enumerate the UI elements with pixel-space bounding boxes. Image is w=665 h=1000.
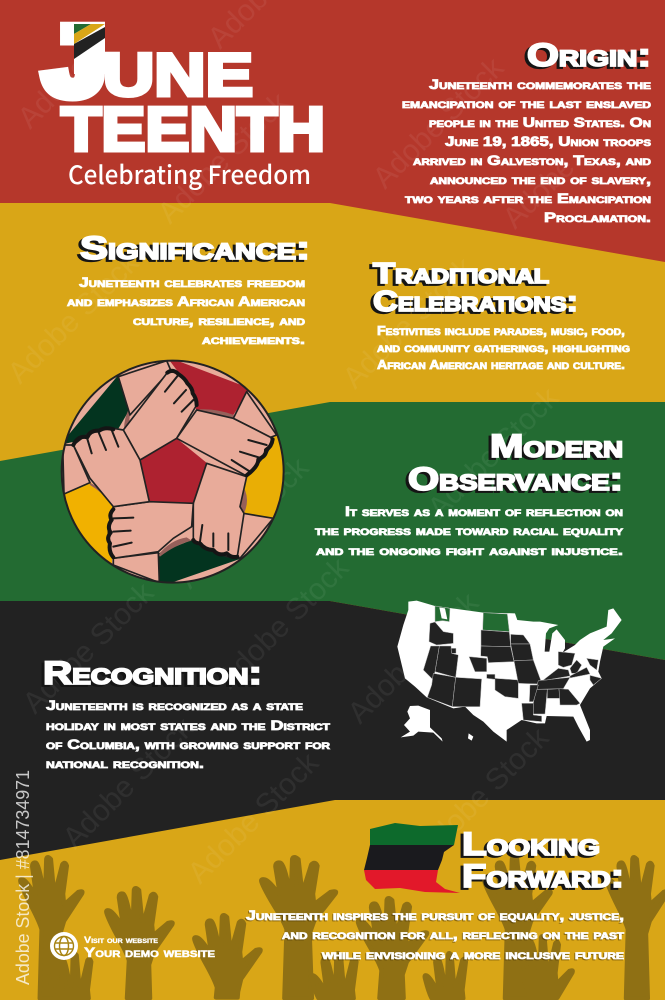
text block: origin: Proclamation. <box>544 210 651 225</box>
title: Juneteenth <box>45 8 325 164</box>
heading: modern observance: Modern <box>490 428 623 464</box>
website callout <box>50 932 215 960</box>
panel: black recognition band <box>0 601 665 860</box>
panel: looking forward <box>246 826 625 962</box>
panel: recognition <box>43 655 331 771</box>
heading: traditional celebrations: Traditional <box>373 258 549 290</box>
panel: significance <box>67 230 310 347</box>
text block: origin: announced the end of slavery, <box>430 172 651 187</box>
watermark <box>2 0 581 890</box>
title: Juneteenth: J <box>45 8 105 115</box>
text block: modern observance: It serves as a moment of reflection on <box>345 504 623 519</box>
text block: origin: people in the United States. On <box>429 115 651 130</box>
panel: red origin band <box>0 0 665 262</box>
text block: significance: and emphasizes African American <box>67 294 305 309</box>
text block: modern observance <box>315 504 623 558</box>
text block: looking forward: and recognition for all, reflecting on the past <box>282 927 625 942</box>
text block: significance: Juneteenth celebrates freedom <box>79 275 305 290</box>
watermark: stock id: Adobe Stock | #814734971 <box>13 770 33 985</box>
text block: recognition: holiday in most states and the District <box>46 718 331 733</box>
text block: origin <box>402 77 652 225</box>
heading: looking forward: Looking <box>462 826 600 862</box>
title: Juneteenth: UNE <box>103 42 253 108</box>
watermark: Adobe <box>497 150 581 235</box>
text block: looking forward: while envisioning a more inclusive future <box>322 947 624 962</box>
text: visit our website: Visit our website <box>84 935 158 945</box>
icon: brush flag <box>364 823 460 893</box>
panel: origin <box>402 37 652 225</box>
text block: traditional celebrations: African American heritage and culture. <box>377 358 625 372</box>
heading: looking forward: Forward: <box>462 858 624 894</box>
watermark: Adobe Stock <box>172 451 316 595</box>
watermark: Adobe Stock <box>367 51 511 195</box>
heading: recognition: Recognition: <box>43 655 262 691</box>
watermark: Adobe Stock <box>57 711 201 855</box>
heading: looking forward <box>462 826 624 894</box>
heading: modern observance: Observance: <box>408 461 623 497</box>
watermark: Adobe Stock <box>182 746 326 890</box>
watermark: Adobe Stock <box>152 86 296 230</box>
text block: looking forward <box>246 908 625 962</box>
text block: origin: Juneteenth commemorates the <box>429 77 651 92</box>
text block: origin: two years after the Emancipation <box>405 191 651 206</box>
watermark: Adobe Stock <box>2 246 146 390</box>
text block: recognition: Juneteenth is recognized as a state <box>46 698 303 713</box>
panel: modern observance <box>315 428 623 558</box>
title: Juneteenth: TEENTH <box>61 96 325 164</box>
icon: interlocked hands circle <box>60 357 290 587</box>
icon: globe <box>50 932 78 960</box>
text block: modern observance: the progress made toward racial equality <box>315 523 623 538</box>
icon: United States map <box>397 601 622 742</box>
text block: recognition: of Columbia, with growing support for <box>46 737 331 752</box>
text: your demo website: Your demo website <box>84 945 215 960</box>
text block: significance: achievements. <box>202 332 305 347</box>
text block: origin: emancipation of the last enslaved <box>402 96 652 111</box>
panel: traditional celebrations <box>373 258 630 372</box>
heading: origin: Origin: <box>527 37 651 73</box>
icon: flag stripes on the J <box>74 24 105 74</box>
text block: looking forward: Juneteenth inspires the pursuit of equality, justice, <box>246 908 624 923</box>
text block: traditional celebrations: Festivities include parades, music, food, <box>377 324 625 338</box>
text block: significance: culture, resilience, and <box>133 313 306 328</box>
watermark: Adobe Stock <box>17 576 161 720</box>
text block: modern observance: and the ongoing fight against injustice. <box>316 543 623 558</box>
watermark: Adobe <box>12 50 96 135</box>
text block: significance <box>67 275 306 347</box>
subtitle: Celebrating Freedom <box>68 156 311 192</box>
text block: traditional celebrations <box>377 324 630 372</box>
text block: origin: June 19, 1865, Union troops <box>445 134 651 149</box>
panel: green modern observance band <box>0 402 665 660</box>
text block: recognition <box>46 698 331 771</box>
watermark: Adobe Stock <box>412 721 556 865</box>
heading: traditional celebrations <box>373 258 578 318</box>
watermark: Adobe Stock <box>422 381 566 525</box>
heading: modern observance <box>408 428 623 497</box>
text block: origin: arrived in Galveston, Texas, and <box>413 153 652 168</box>
heading: traditional celebrations: Celebrations: <box>373 286 578 318</box>
watermark: Adobe Stock <box>337 251 481 395</box>
watermark: Adobe Stock <box>342 586 486 730</box>
heading: significance: Significance: <box>80 230 310 266</box>
raised hands silhouette <box>20 857 665 998</box>
text block: recognition: national recognition. <box>46 756 204 771</box>
watermark: Adobe Stock <box>212 551 356 695</box>
text block: traditional celebrations: and community gatherings, highlighting <box>377 341 630 355</box>
